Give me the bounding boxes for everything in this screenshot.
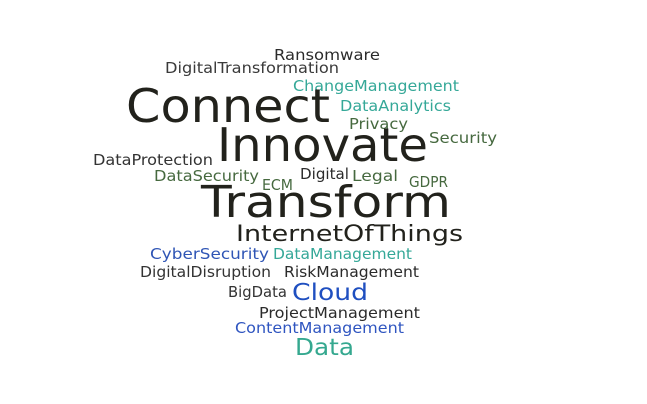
word: Connect: Connect [126,79,330,133]
word: Data: Data [295,335,354,361]
word: ChangeManagement: ChangeManagement [293,77,459,95]
word: DigitalTransformation: DigitalTransformation [165,59,339,77]
word: ECM: ECM [262,176,293,194]
word: Transform: Transform [200,177,451,228]
word: Security: Security [429,129,497,147]
word: DataSecurity: DataSecurity [154,167,259,185]
word: Cloud: Cloud [292,280,368,306]
word: Legal: Legal [352,167,398,185]
word: ProjectManagement: ProjectManagement [259,304,420,322]
word: DigitalDisruption: DigitalDisruption [140,263,271,281]
word: InternetOfThings: InternetOfThings [236,221,463,247]
word: DataAnalytics: DataAnalytics [340,97,451,115]
word: ContentManagement: ContentManagement [235,319,404,337]
word: Digital: Digital [300,165,349,183]
word: RiskManagement: RiskManagement [284,263,419,281]
word: GDPR: GDPR [409,173,448,191]
word: BigData: BigData [228,283,287,301]
word: DataProtection: DataProtection [93,151,213,169]
word: Privacy: Privacy [349,115,408,133]
word: DataManagement: DataManagement [273,245,412,263]
word: CyberSecurity: CyberSecurity [150,245,269,263]
word: Ransomware: Ransomware [274,46,380,64]
word: Innovate: Innovate [217,118,428,172]
